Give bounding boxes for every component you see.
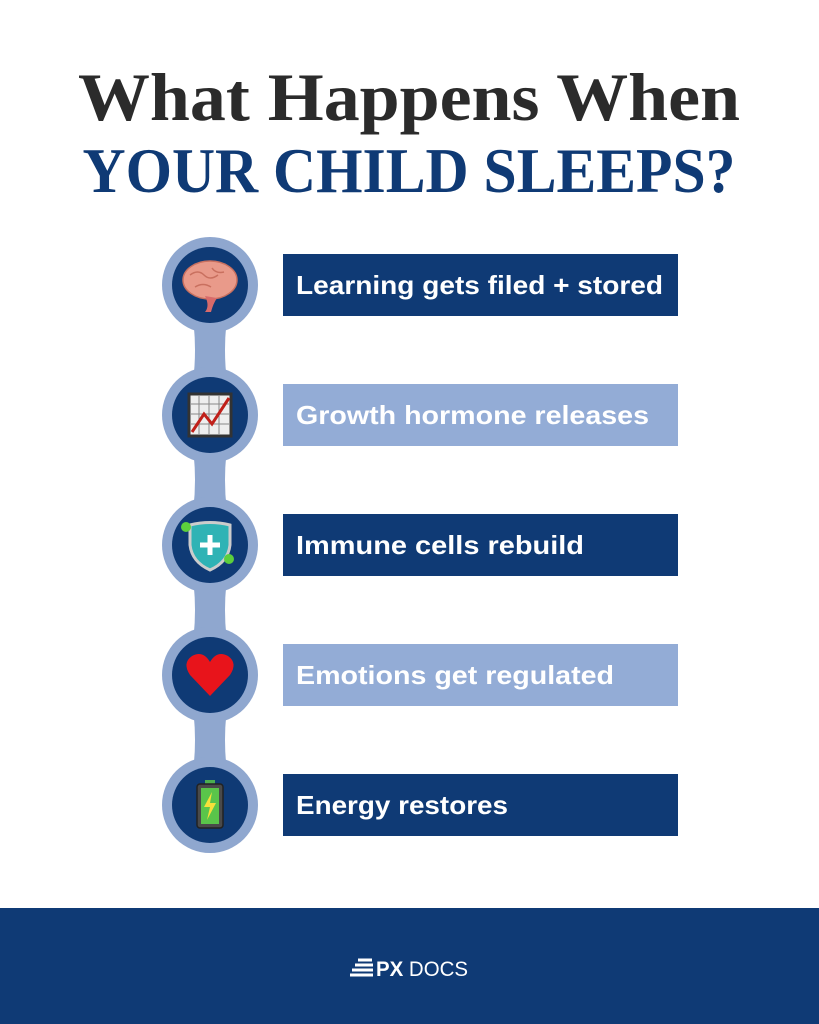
icon: battery <box>197 780 223 828</box>
title: YOUR CHILD SLEEPS? <box>82 135 736 206</box>
timeline connector <box>190 300 230 790</box>
icon: chart <box>189 394 231 436</box>
icon: shield <box>181 522 234 570</box>
icon: brain <box>183 261 237 312</box>
step 2: growth: Growth hormone releases <box>296 400 649 430</box>
step 4: emotions <box>162 627 678 723</box>
step 2: growth <box>162 367 678 463</box>
logo: PX DOCS <box>376 958 468 981</box>
step 3: immune <box>162 497 678 593</box>
step 5: energy: Energy restores <box>296 790 508 820</box>
title: What Happens When <box>78 59 740 135</box>
step 5: energy <box>162 757 678 853</box>
step 1: learning <box>162 237 678 333</box>
step 4: emotions: Emotions get regulated <box>296 660 614 690</box>
step 3: immune: Immune cells rebuild <box>296 530 584 560</box>
step 1: learning: Learning gets filed + stored <box>296 270 663 300</box>
title <box>78 59 740 206</box>
icon: heart <box>186 654 234 696</box>
footer <box>0 908 819 1024</box>
